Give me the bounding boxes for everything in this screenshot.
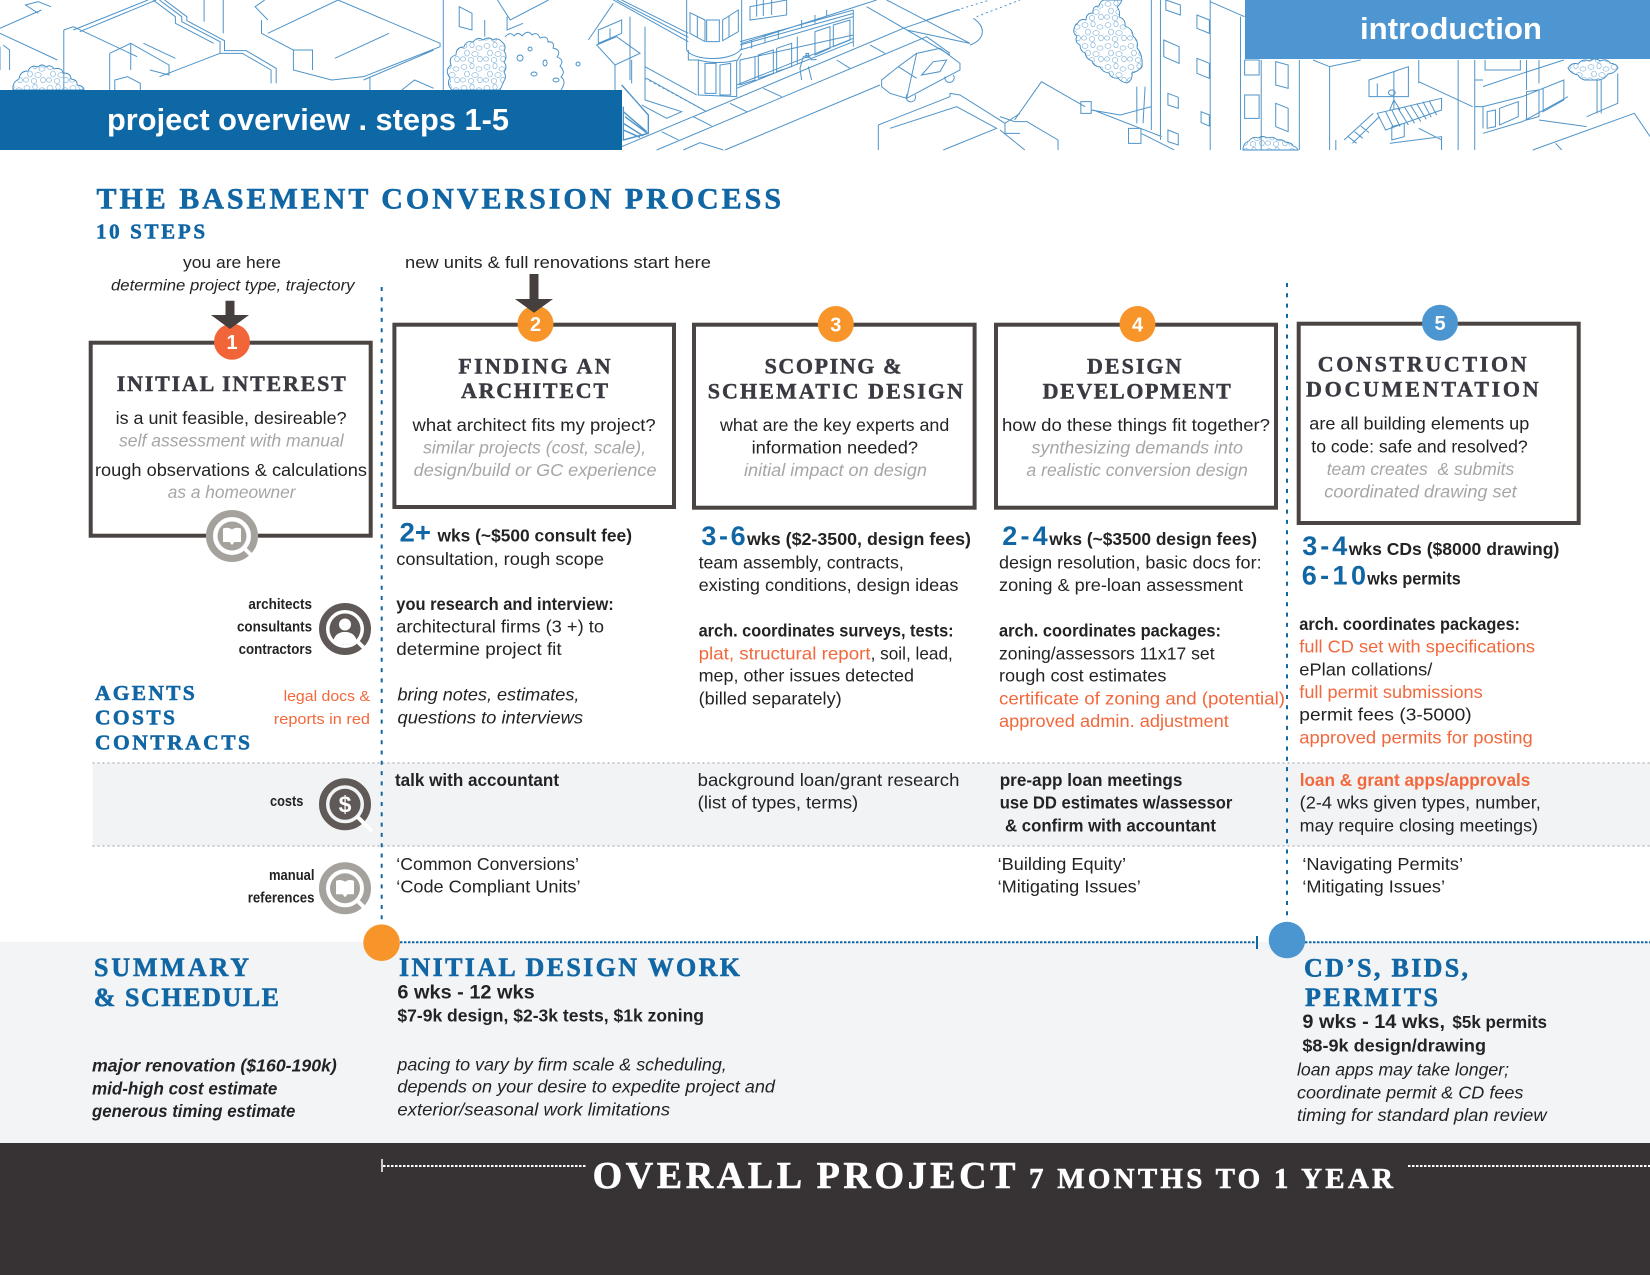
step 5 details: 3-4: [1302, 531, 1347, 561]
manual references: step 5: ‘Navigating Permits’: [1302, 854, 1463, 874]
summary column: initial design work: depends on your desire to expedite project and: [397, 1077, 776, 1097]
row label: manual references: references: [248, 890, 314, 906]
trees in the drawing: [13, 0, 1618, 150]
costs row text: step 4: [1000, 770, 1233, 835]
step 2 card: finding an architect: design/build or GC experience: [414, 460, 657, 480]
title: [96, 182, 781, 244]
costs row text: step 4: & confirm with accountant: [1005, 815, 1216, 835]
row label: costs: costs: [270, 794, 303, 810]
costs band background: [92, 763, 1650, 846]
manual references: step 2: [396, 854, 581, 897]
step 1 card: initial interest: self assessment with manual: [119, 431, 345, 451]
step 4 card: design development: [996, 306, 1276, 508]
summary column: CDs bids permits: PERMITS: [1305, 983, 1438, 1012]
summary column: CDs bids permits: loan apps may take longer;: [1297, 1060, 1509, 1080]
summary band background: [0, 942, 1650, 1143]
summary column: CDs bids permits: timing for standard plan review: [1297, 1105, 1548, 1125]
step 2 details: consultation, rough scope: [396, 549, 604, 569]
step 4 marker: 4: [1132, 314, 1144, 336]
step 3 details: (billed separately): [699, 688, 842, 708]
note: new units start here: new units & full renovations start here: [405, 254, 711, 272]
costs row text: step 4: use DD estimates w/assessor: [1000, 793, 1233, 813]
banner: project overview steps 1-5: [0, 90, 622, 150]
step 5 card: construction documentation: coordinated drawing set: [1324, 482, 1518, 502]
manual references: step 2: ‘Code Compliant Units’: [396, 877, 581, 897]
step 1 card: initial interest: is a unit feasible, desireable?: [116, 408, 347, 428]
step 1 card: initial interest: as a homeowner: [168, 482, 297, 502]
summary column: CDs bids permits: coordinate permit & CD fees: [1297, 1082, 1524, 1102]
icon: costs dollar in magnifier: $: [339, 792, 352, 818]
summary estimate notes: generous timing estimate: [91, 1101, 296, 1121]
step 4 details: rough cost estimates: [999, 666, 1167, 686]
step 2 marker: [518, 306, 554, 342]
step 5 card: construction documentation: are all building elements up: [1309, 414, 1529, 434]
overall project duration: OVERALL PROJECT: [593, 1155, 1016, 1197]
step 4 details: zoning/assessors 11x17 set: [999, 643, 1215, 663]
header illustration: isometric neighbourhood line drawing: [0, 0, 1650, 150]
costs row text: step 5: loan & grant apps/approvals: [1300, 770, 1531, 790]
vertical timeline markers: [382, 283, 1287, 925]
step 2 details: you research and interview:: [396, 594, 614, 614]
title: THE BASEMENT CONVERSION PROCESS: [96, 182, 781, 216]
summary column: CDs bids permits: CD’S, BIDS,: [1304, 954, 1468, 983]
step 5 card: construction documentation: to code: safe and resolved?: [1311, 436, 1528, 456]
step 2 marker: 2: [530, 314, 541, 336]
step 3 details: mep, other issues detected: [699, 666, 914, 686]
summary column: initial design work: 6 wks - 12 wks: [397, 983, 535, 1004]
costs row text: step 3: (list of types, terms): [698, 793, 858, 813]
step 5 marker: [1422, 305, 1458, 341]
banner: introduction: introduction: [1360, 11, 1542, 46]
note: you are here: determine project type, trajectory: [111, 278, 356, 294]
step 4 details: wks (~$3500 design fees): [1048, 529, 1257, 549]
step 2 card: finding an architect: similar projects (cost, scale),: [423, 438, 646, 458]
step 3 card: scoping and schematic design: SCOPING &: [765, 353, 901, 378]
arrow to step 2: [515, 274, 553, 313]
step 3 card: scoping and schematic design: what are the key experts and: [719, 415, 949, 435]
summary column: initial design work: pacing to vary by firm scale & scheduling,: [396, 1055, 727, 1075]
step 5 details: 6-10: [1302, 560, 1366, 590]
overall project duration: 7 MONTHS TO 1 YEAR: [1029, 1163, 1394, 1195]
section heading: agents costs contracts: COSTS: [95, 705, 175, 729]
summary column: initial design work: exterior/seasonal work limitations: [397, 1099, 670, 1119]
title: 10 STEPS: [96, 220, 205, 244]
legend note: legal docs in red: reports in red: [274, 711, 370, 728]
step 2 details: determine project fit: [396, 639, 562, 659]
step 3 details: arch. coordinates surveys, tests:: [699, 621, 954, 641]
step 2 details: bring notes, estimates,: [398, 685, 579, 705]
banner: project overview steps 1-5: project overview . steps 1-5: [107, 102, 509, 137]
banner: introduction: [1245, 0, 1650, 59]
timeline marker: orange: [363, 924, 400, 961]
step 5 details: full CD set with specifications: [1299, 637, 1535, 657]
row label: agents: [237, 597, 312, 658]
step 4 details: zoning & pre-loan assessment: [999, 575, 1243, 595]
summary estimate notes: major renovation ($160-190k): [92, 1056, 337, 1076]
costs row text: step 4: pre-app loan meetings: [1000, 770, 1183, 790]
icon: manual book in magnifier: [322, 866, 372, 915]
row label: agents: architects: [248, 597, 312, 613]
manual references: step 5: [1302, 854, 1463, 897]
costs row text: step 5: may require closing meetings): [1300, 815, 1538, 835]
note: you are here: [111, 254, 356, 294]
step 1 card: initial interest: INITIAL INTEREST: [117, 371, 346, 396]
step 4 marker: [1120, 306, 1156, 342]
timeline marker: blue: [1269, 922, 1305, 958]
manual references: step 2: ‘Common Conversions’: [396, 854, 579, 874]
summary estimate notes: [91, 1056, 337, 1121]
step 4 details: arch. coordinates packages:: [999, 621, 1221, 641]
step 2 card: finding an architect: FINDING AN: [458, 353, 611, 378]
step 1 marker: [214, 324, 250, 360]
step 4 details: [999, 521, 1285, 731]
section heading: agents costs contracts: AGENTS: [95, 681, 195, 705]
step 2 details: questions to interviews: [398, 707, 583, 727]
icon: agents person in magnifier: [322, 606, 372, 656]
step 1 marker: 1: [226, 332, 238, 354]
step 3 details: plat, structural report: [699, 643, 871, 663]
step 3 marker: 3: [830, 314, 841, 336]
step 5 card: construction documentation: DOCUMENTATION: [1306, 376, 1539, 401]
manual references: step 4: ‘Mitigating Issues’: [998, 877, 1141, 897]
step 3 details: , soil, lead,: [871, 643, 953, 663]
step 4 card: design development: a realistic conversion design: [1026, 460, 1248, 480]
step 5 marker: 5: [1434, 313, 1446, 335]
legend note: legal docs in red: legal docs &: [284, 688, 370, 705]
costs row text: step 5: [1300, 770, 1541, 835]
step 4 card: design development: DEVELOPMENT: [1043, 378, 1231, 403]
summary and schedule heading: & SCHEDULE: [94, 983, 279, 1012]
step 5 details: wks CDs ($8000 drawing): [1348, 539, 1559, 559]
step 4 details: 2-4: [1002, 521, 1048, 551]
summary column: CDs bids permits: [1297, 954, 1548, 1125]
summary column: initial design work: $7-9k design, $2-3k tests, $1k zoning: [397, 1006, 704, 1026]
step 5 card: construction documentation: CONSTRUCTION: [1318, 351, 1527, 376]
summary column: CDs bids permits: $5k permits: [1452, 1012, 1547, 1032]
manual references: step 4: ‘Building Equity’: [998, 854, 1126, 874]
step 3 card: scoping and schematic design: SCHEMATIC DESIGN: [708, 378, 963, 403]
step 2 details: wks (~$500 consult fee): [437, 526, 632, 546]
row label: manual references: [248, 868, 314, 906]
step 4 details: design resolution, basic docs for:: [999, 552, 1262, 572]
row label: agents: consultants: [237, 620, 312, 636]
step 4 card: design development: DESIGN: [1087, 353, 1182, 378]
summary and schedule heading: SUMMARY: [94, 953, 249, 982]
icon: costs dollar in magnifier: [322, 782, 372, 831]
summary column: initial design work: INITIAL DESIGN WORK: [399, 953, 741, 982]
costs row text: step 3: background loan/grant research: [698, 770, 959, 790]
step 1 card: initial interest: [91, 301, 371, 562]
summary column: initial design work: [396, 953, 776, 1119]
arrow to step 1: [211, 301, 249, 329]
step 5 details: wks permits: [1366, 568, 1461, 588]
step 2 details: 2+: [400, 518, 431, 548]
summary column: CDs bids permits: 9 wks - 14 wks,: [1302, 1012, 1445, 1033]
step 5 card: construction documentation: team creates & submits: [1327, 459, 1515, 479]
section heading: agents costs contracts: CONTRACTS: [95, 730, 250, 754]
step 5 details: arch. coordinates packages:: [1299, 614, 1520, 634]
costs row text: step 5: (2-4 wks given types, number,: [1300, 793, 1541, 813]
manual references: step 5: ‘Mitigating Issues’: [1302, 877, 1445, 897]
step 2 details: architectural firms (3 +) to: [396, 617, 604, 637]
step 3 card: scoping and schematic design: information needed?: [752, 438, 918, 458]
step 3 details: team assembly, contracts,: [699, 552, 904, 572]
row label: agents: contractors: [239, 642, 312, 658]
step 5 details: full permit submissions: [1299, 682, 1483, 702]
footer band: [0, 1143, 1650, 1275]
section heading: agents costs contracts: [95, 681, 250, 754]
costs row text: step 3: [698, 770, 959, 813]
step 2 details: [396, 518, 632, 727]
step 3 card: scoping and schematic design: [694, 306, 975, 508]
step 3 details: wks ($2-3500, design fees): [746, 529, 971, 549]
step 5 details: ePlan collations/: [1299, 660, 1432, 680]
step 3 card: scoping and schematic design: initial impact on design: [744, 460, 927, 480]
step 2 card: finding an architect: ARCHITECT: [461, 378, 608, 403]
summary column: CDs bids permits: $8-9k design/drawing: [1302, 1036, 1486, 1056]
step 1 card: initial interest: rough observations & calculations: [95, 460, 367, 480]
step 3 details: existing conditions, design ideas: [699, 575, 959, 595]
step 3 details: 3-6: [701, 521, 746, 551]
overall project duration: [382, 1155, 1650, 1197]
step 5 details: permit fees (3-5000): [1299, 705, 1472, 725]
legend note: legal docs in red: [274, 688, 370, 728]
summary and schedule heading: [94, 953, 279, 1012]
note: you are here: you are here: [183, 254, 281, 272]
step 4 details: certificate of zoning and (potential): [999, 688, 1285, 708]
step 5 card: construction documentation: [1299, 305, 1579, 523]
step 4 details: approved admin. adjustment: [999, 711, 1229, 731]
row label: manual references: manual: [269, 868, 314, 884]
step 3 marker: [818, 306, 854, 342]
timeline: design phase to permits: [400, 936, 1650, 949]
step 4 card: design development: synthesizing demands into: [1032, 438, 1243, 458]
costs row text: step 2: talk with accountant: [395, 770, 559, 790]
step 4 card: design development: how do these things fit together?: [1002, 415, 1270, 435]
step 5 details: [1299, 531, 1559, 747]
step 2 card: finding an architect: what architect fits my project?: [411, 415, 656, 435]
manual references: step 4: [998, 854, 1141, 897]
step 2 card: finding an architect: [394, 274, 674, 507]
summary estimate notes: mid-high cost estimate: [92, 1078, 278, 1098]
step 5 details: approved permits for posting: [1299, 727, 1533, 747]
step 3 details: [699, 521, 971, 708]
icon: manual reference on card 1: [206, 510, 258, 562]
